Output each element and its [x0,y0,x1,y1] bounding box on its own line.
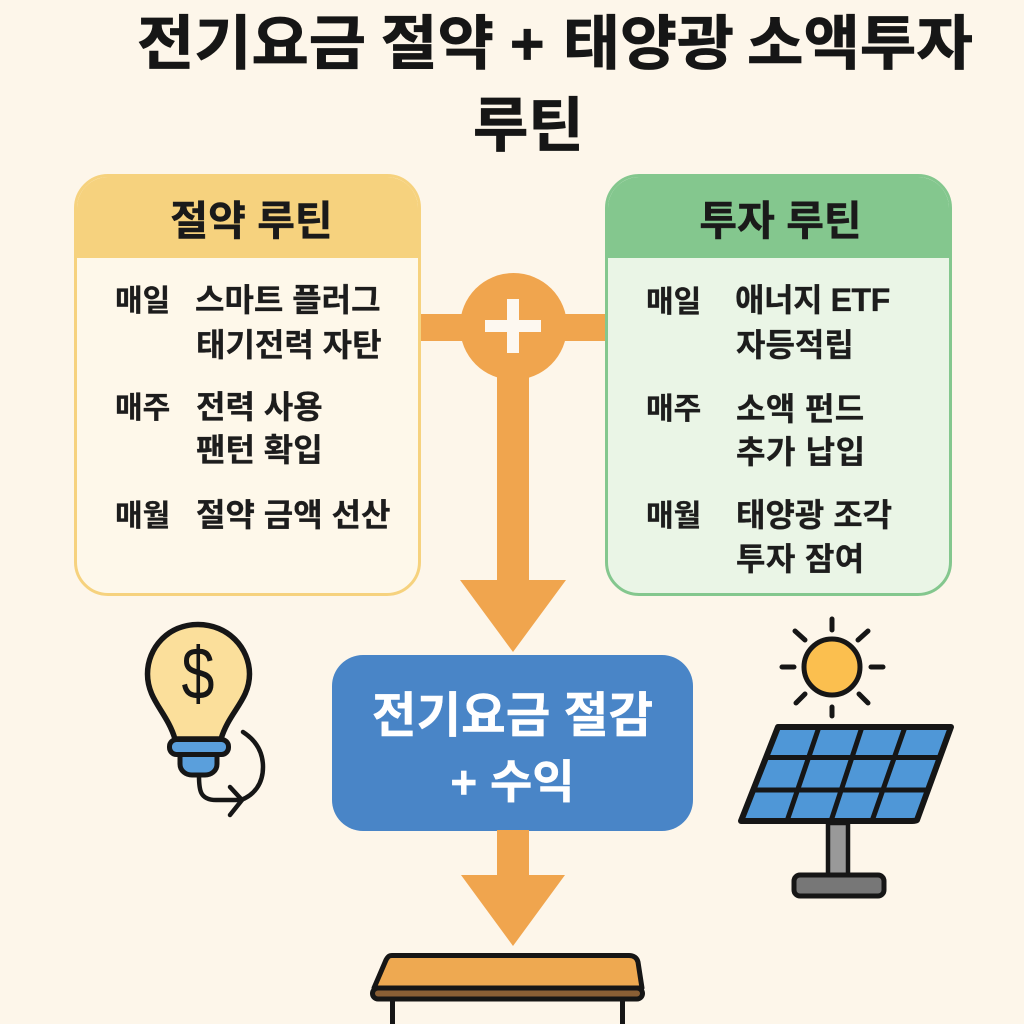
row: monthly solar fractional: 매월 [646,500,701,533]
row: daily smart plug: 스마트 플러그 [195,282,381,318]
row: weekly small fund: 추가 납입 [736,434,866,470]
title: 전기요금 [137,11,366,77]
icon: light bulb with dollar [144,622,266,818]
title: 루틴 [473,93,584,159]
row: monthly solar fractional [646,497,892,577]
connector: horizontal plus bar [420,314,606,341]
row: weekly usage pattern [115,389,323,468]
row: weekly small fund [646,391,866,470]
row: daily energy ETF: 애너지 ETF [735,282,890,318]
row: daily energy ETF [646,282,890,363]
title: + [510,11,544,77]
panel heading: investing routine [605,174,952,258]
row: daily smart plug: 매일 [115,285,170,318]
icon: light bulb with dollar: $ [182,633,214,716]
result box: 전기요금 절감 [372,689,653,743]
row: daily smart plug: 태기전력 자탄 [196,327,382,363]
row: daily energy ETF: 매일 [646,286,701,319]
result box [332,655,693,831]
row: weekly usage pattern: 매주 [115,392,170,425]
panel: investing routine [605,174,952,596]
row: daily energy ETF: 자등적립 [736,327,854,363]
row: daily smart plug [115,282,382,363]
icon: plus circle and arrow down [460,273,566,652]
panel heading: saving routine [74,174,421,258]
arrow: result to table [461,830,565,946]
row: weekly small fund: 매주 [646,393,701,426]
icon: sun and solar panel [738,616,954,898]
panel heading: saving routine: 절약 루틴 [170,198,333,244]
row: monthly solar fractional: 투자 잠여 [736,541,865,577]
title: 태양광 [563,11,734,77]
row: weekly usage pattern: 팬턴 확입 [196,432,323,468]
row: monthly solar fractional: 태양광 조각 [736,497,892,533]
row: daily savings calc: 매월 [115,500,170,533]
title: 소액투자 [747,11,973,77]
title: 절약 [381,11,494,77]
panel heading: investing routine: 투자 루틴 [699,198,862,244]
row: weekly small fund: 소액 펀드 [736,391,865,427]
row: weekly usage pattern: 전력 사용 [196,389,323,425]
title [137,11,973,159]
panel: saving routine [74,174,421,596]
result box: + 수익 [450,756,575,808]
row: daily savings calc: 절약 금액 선산 [196,497,390,533]
icon: table at bottom [370,953,645,1024]
